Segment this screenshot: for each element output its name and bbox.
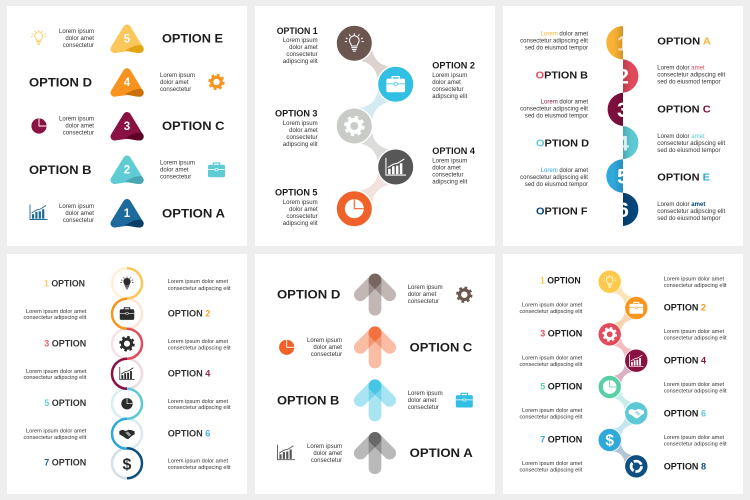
row: option A: consectetur [63, 218, 94, 224]
left labels: consectetur adipscing elit [23, 315, 87, 321]
left labels: Lorem ipsum dolor amet [26, 369, 87, 375]
right labels: OPTION 4 [664, 355, 707, 366]
row: option E: OPTION E [162, 32, 223, 46]
step 4: consectetur [432, 172, 464, 178]
row: option A: consectetur [311, 458, 342, 464]
row: option A: OPTION A [657, 35, 711, 47]
row: option A: Lorem dolor amet [541, 32, 588, 38]
step 5: OPTION 5 [275, 187, 318, 198]
row: option C: consectetur [311, 352, 342, 358]
left labels: consectetur adipscing elit [519, 362, 583, 368]
step 1: OPTION 1 [277, 26, 318, 37]
row: option F: 6 [617, 198, 629, 222]
row: option E: 5 [617, 165, 629, 189]
row: option B: dolor amet [408, 398, 437, 404]
row: option E [31, 28, 223, 53]
right labels [168, 279, 231, 471]
row: option B: consectetur [408, 405, 439, 411]
row: option B [277, 379, 473, 415]
right labels: consectetur adipscing elit [664, 283, 727, 289]
step 1 [277, 25, 372, 65]
right labels [664, 276, 727, 472]
row: option A: sed do eiusmod tempor [525, 46, 588, 52]
row: option D: consectetur [408, 299, 439, 305]
light ring halves [112, 268, 142, 478]
left labels: 1 OPTION [540, 276, 581, 287]
row: option B: OPTION B [536, 69, 588, 81]
right labels: Lorem ipsum dolor amet [168, 399, 228, 405]
left labels: Lorem ipsum dolor amet [522, 408, 583, 414]
right labels: Lorem ipsum dolor amet [168, 458, 228, 464]
step 1: consectetur [286, 52, 318, 58]
row: option A [278, 432, 473, 468]
right labels: OPTION 6 [168, 428, 210, 439]
row: option B: dolor amet [160, 168, 189, 174]
row: option C: consectetur [63, 130, 94, 136]
coloured ring halves [112, 268, 142, 478]
step 3: adipscing elit [283, 142, 318, 148]
row: option A: OPTION A [410, 446, 473, 460]
row: option A: 1 [617, 31, 629, 55]
right labels: consectetur adipscing elit [168, 346, 231, 352]
row: option A [520, 26, 711, 59]
row: option C: Lorem dolor amet [541, 100, 588, 106]
step 5 [275, 187, 372, 227]
left labels: 3 OPTION [44, 338, 86, 349]
right labels: consectetur adipscing elit [168, 405, 231, 411]
left labels: 1 OPTION [44, 279, 85, 290]
row: option D: 4 [124, 77, 131, 89]
row: option A: dolor amet [65, 211, 94, 217]
row: option D: Lorem ipsum [408, 285, 443, 291]
row: option D: Lorem ipsum [160, 73, 195, 79]
right labels: OPTION 4 [168, 369, 211, 380]
left labels: consectetur adipscing elit [23, 375, 87, 381]
right labels: Lorem ipsum dolor amet [168, 279, 228, 285]
left labels: Lorem ipsum dolor amet [26, 309, 87, 315]
row: option B: 2 [617, 65, 629, 89]
row: option D: dolor amet [160, 80, 189, 86]
step 2: Lorem ipsum [432, 73, 467, 79]
row: option B: OPTION B [277, 393, 340, 407]
panel: eight step zigzag [503, 254, 743, 494]
left labels: 5 OPTION [540, 381, 582, 392]
step 3: OPTION 3 [275, 109, 318, 120]
left labels: Lorem ipsum dolor amet [522, 461, 583, 467]
row: option B [536, 59, 726, 93]
left labels: 7 OPTION [44, 458, 86, 469]
row: option B: consectetur adipscing elit [657, 72, 726, 78]
left labels: consectetur adipscing elit [519, 309, 583, 315]
row: option C: dolor amet [313, 345, 342, 351]
left labels: Lorem ipsum dolor amet [522, 356, 583, 362]
row: option D: consectetur [160, 87, 191, 93]
step 4: OPTION 4 [432, 146, 476, 157]
left labels: 7 OPTION [540, 434, 582, 445]
row: option D: OPTION D [536, 138, 589, 150]
connectors [609, 281, 637, 467]
right labels: consectetur adipscing elit [664, 442, 727, 448]
row: option D: OPTION D [29, 76, 92, 90]
step 3: Lorem ipsum [283, 121, 318, 127]
row: option E: OPTION E [657, 171, 710, 183]
left labels: 5 OPTION [44, 398, 86, 409]
row: option A: 1 [124, 208, 131, 220]
row: option B: Lorem ipsum [160, 160, 195, 166]
right labels: consectetur adipscing elit [168, 465, 231, 471]
right labels: Lorem ipsum dolor amet [168, 339, 228, 345]
step 4: Lorem ipsum [432, 158, 467, 164]
right labels: OPTION 2 [664, 303, 706, 314]
right labels: consectetur adipscing elit [664, 388, 727, 394]
row: option D [277, 274, 471, 309]
row: option C: consectetur adipscing elit [520, 106, 588, 112]
row: option A: dolor amet [313, 451, 342, 457]
row: option E [520, 159, 710, 193]
row: option D: Lorem dolor amet [657, 134, 705, 140]
panel: zigzag circles [255, 6, 495, 246]
right labels: OPTION 2 [168, 309, 210, 320]
step 5: Lorem ipsum [283, 200, 318, 206]
left labels [519, 276, 583, 474]
step 2: adipscing elit [432, 94, 468, 100]
row: option C: OPTION C [657, 103, 711, 115]
step circles [598, 270, 648, 478]
row: option B: OPTION B [29, 163, 92, 177]
ring icons [119, 277, 135, 473]
row: option A: Lorem ipsum [307, 444, 342, 450]
left labels: consectetur adipscing elit [519, 468, 583, 474]
left labels: consectetur adipscing elit [519, 414, 583, 420]
step 4 [378, 146, 476, 186]
step 1: Lorem ipsum [283, 38, 318, 44]
row: option A [30, 203, 225, 228]
row: option C: OPTION C [162, 119, 225, 133]
row: option E: Lorem ipsum [59, 29, 94, 35]
row: option E: consectetur [63, 43, 94, 49]
row: option C [279, 326, 473, 362]
right labels: Lorem ipsum dolor amet [664, 329, 724, 335]
step 1: adipscing elit [283, 59, 318, 65]
row: option F: OPTION F [536, 206, 588, 218]
row: option D: sed do eiusmod tempor [657, 148, 721, 154]
right labels: Lorem ipsum dolor amet [664, 382, 724, 388]
row: option C: 3 [617, 98, 629, 122]
row: option A: OPTION A [162, 207, 225, 221]
panel: half circles [503, 6, 743, 246]
row: option A: Lorem ipsum [59, 204, 94, 210]
step 3: dolor amet [289, 128, 318, 134]
row: option C: 3 [124, 121, 130, 133]
step 2: OPTION 2 [432, 61, 475, 72]
row: option D [29, 72, 224, 97]
step 2 [378, 61, 475, 103]
left labels: 3 OPTION [540, 328, 582, 339]
step 2: consectetur [432, 87, 464, 93]
row: option C: Lorem ipsum [307, 338, 342, 344]
row: option B [29, 160, 225, 184]
step 3: consectetur [286, 135, 318, 141]
right labels: consectetur adipscing elit [664, 336, 727, 342]
row: option D [536, 126, 726, 159]
row: option F: consectetur adipscing elit [657, 209, 726, 215]
step 1: dolor amet [289, 45, 318, 51]
ring icons: $ [123, 456, 132, 473]
row: option C: sed do eiusmod tempor [525, 114, 588, 120]
step 5: consectetur [286, 214, 318, 220]
right labels: Lorem ipsum dolor amet [664, 276, 724, 282]
left labels: consectetur adipscing elit [23, 435, 87, 441]
left labels: Lorem ipsum dolor amet [522, 302, 583, 308]
right labels: OPTION 6 [664, 408, 706, 419]
step 3 [275, 108, 372, 148]
right labels: OPTION 8 [664, 461, 706, 472]
panel: triangle list [7, 6, 247, 246]
step 5: dolor amet [289, 207, 318, 213]
row: option F: Lorem dolor amet [657, 202, 705, 208]
connectors [354, 43, 396, 208]
right labels: consectetur adipscing elit [168, 286, 231, 292]
row: option D: 4 [617, 131, 629, 155]
step 4: dolor amet [432, 166, 461, 172]
row: option B: 2 [124, 164, 130, 176]
row: option A: consectetur adipscing elit [520, 38, 588, 44]
row: option B: sed do eiusmod tempor [657, 80, 721, 86]
row: option C: OPTION C [410, 341, 473, 355]
row: option C: Lorem ipsum [59, 116, 94, 122]
left labels: Lorem ipsum dolor amet [26, 428, 87, 434]
row: option D: consectetur adipscing elit [657, 141, 726, 147]
row: option B: consectetur [160, 174, 191, 180]
row: option C [520, 93, 711, 126]
step 5: adipscing elit [283, 221, 318, 227]
row: option C: dolor amet [65, 124, 94, 130]
step icons [603, 275, 644, 471]
row: option B: Lorem dolor amet [657, 66, 705, 72]
row: option E: consectetur adipscing elit [520, 175, 588, 181]
row: option D: OPTION D [277, 288, 341, 302]
row: option D: dolor amet [408, 292, 437, 298]
step 4: adipscing elit [432, 180, 468, 186]
panel: up arrows [255, 254, 495, 494]
left labels [23, 279, 87, 469]
row: option E: 5 [124, 34, 131, 46]
panel: ring chain [7, 254, 247, 494]
right labels: Lorem ipsum dolor amet [664, 435, 724, 441]
row: option E: sed do eiusmod tempor [525, 182, 588, 188]
step 2: dolor amet [432, 80, 461, 86]
row: option F [536, 193, 726, 226]
row: option E: Lorem dolor amet [541, 168, 588, 174]
row: option E: dolor amet [65, 36, 94, 42]
step icons: $ [605, 432, 614, 450]
row: option C [31, 116, 225, 141]
row: option B: Lorem ipsum [408, 391, 443, 397]
row: option F: sed do eiusmod tempor [657, 216, 721, 222]
